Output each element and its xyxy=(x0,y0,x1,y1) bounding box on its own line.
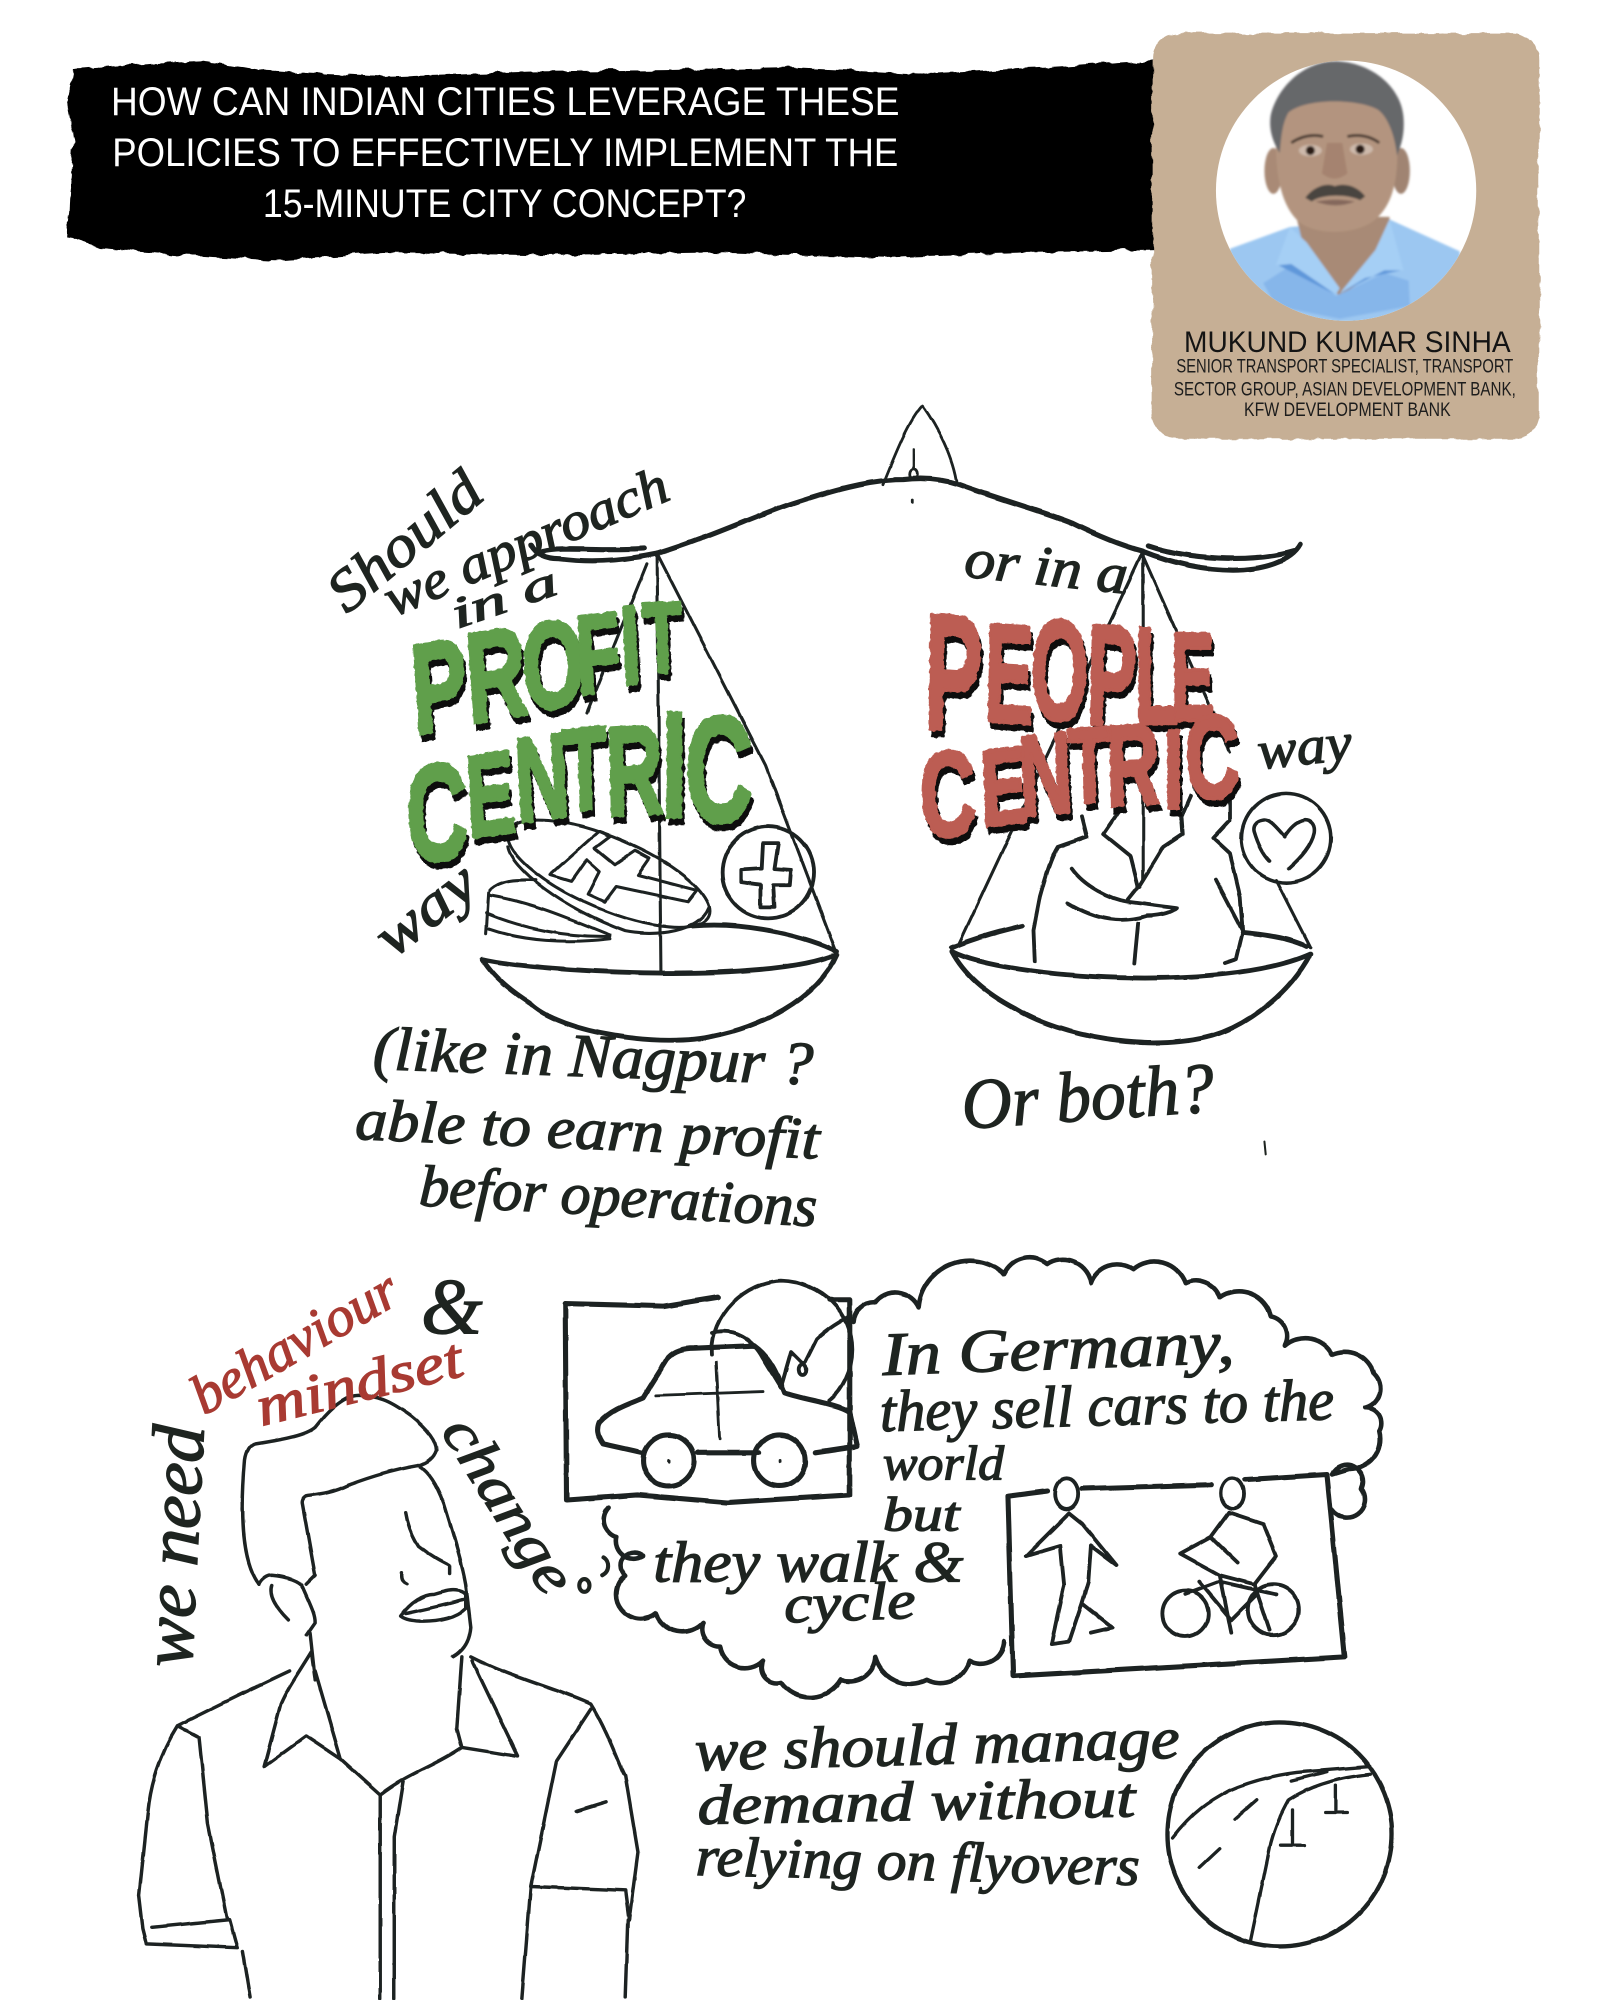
balance scale xyxy=(482,406,1331,1043)
shirt body xyxy=(139,1657,638,1999)
hugging couple xyxy=(1033,796,1243,963)
car xyxy=(598,1346,857,1453)
walking and cycling panel xyxy=(1008,1474,1345,1676)
coins xyxy=(486,798,722,949)
scale apex xyxy=(883,406,957,503)
heading: people centric: P xyxy=(923,579,984,769)
heart icon xyxy=(1241,793,1331,883)
heading: people centric: L xyxy=(1135,600,1178,753)
heading: profit centric: N xyxy=(512,709,572,849)
heading: profit centric: E xyxy=(463,726,518,863)
profit-centric question text: Should xyxy=(314,457,496,625)
Germany text: cycle xyxy=(783,1570,916,1634)
heading: profit centric: T xyxy=(641,580,684,695)
Germany text: but xyxy=(883,1489,961,1542)
profit-centric question text xyxy=(314,455,677,638)
ear xyxy=(259,1575,315,1635)
speaker role xyxy=(1174,355,1516,421)
title text: POLICIES TO EFFECTIVELY IMPLEMENT THE xyxy=(112,130,898,175)
title banner xyxy=(68,60,1161,260)
heading: people centric: R xyxy=(1105,701,1161,831)
profit-centric question text: in a xyxy=(444,557,564,638)
heading: profit centric: I xyxy=(661,681,687,849)
panel frame xyxy=(565,1297,850,1503)
hair and face xyxy=(243,1395,471,1657)
title text: 15-MINUTE CITY CONCEPT? xyxy=(263,181,746,226)
heading: profit centric: I xyxy=(617,582,643,710)
note: Nagpur xyxy=(354,1015,823,1239)
title text: HOW CAN INDIAN CITIES LEVERAGE THESE xyxy=(111,79,900,124)
mindset caption xyxy=(126,1259,589,1669)
label: or in a: or in a xyxy=(962,528,1131,607)
heading: people centric: C xyxy=(1183,689,1242,825)
rupee symbol xyxy=(550,832,697,902)
Germany text: they sell cars to the xyxy=(879,1367,1335,1444)
heading: profit centric: R xyxy=(604,699,664,844)
walker xyxy=(1026,1478,1116,1644)
heading: people centric: E xyxy=(978,725,1030,850)
title text xyxy=(111,79,900,226)
Germany text xyxy=(653,1309,1335,1634)
heading: profit centric: O xyxy=(517,592,588,738)
heading: profit centric: C xyxy=(685,686,752,854)
right pan xyxy=(952,926,1310,1043)
car and globe panel xyxy=(565,1281,857,1503)
flyover icon xyxy=(1167,1722,1392,1946)
text: ampersand: & xyxy=(421,1264,483,1351)
man looking up xyxy=(139,1395,638,1999)
stray pen mark xyxy=(1264,1142,1266,1154)
text: behaviour mindset: behaviour xyxy=(180,1259,410,1427)
speaker photo xyxy=(1212,57,1480,332)
note: or both: Or both? xyxy=(959,1048,1217,1145)
speaker role: KFW DEVELOPMENT BANK xyxy=(1244,399,1451,421)
speaker name: MUKUND KUMAR SINHA xyxy=(1184,326,1511,359)
heading: profit centric: T xyxy=(561,702,609,836)
heading: people centric: I xyxy=(1164,707,1184,832)
globe xyxy=(712,1281,852,1401)
Germany text: In Germany, xyxy=(880,1309,1235,1389)
heading: profit centric: R xyxy=(462,599,531,750)
plus icon xyxy=(722,827,814,918)
heading: profit centric: C xyxy=(403,733,471,893)
left pan xyxy=(482,925,837,1040)
note: Nagpur: (like in Nagpur ? xyxy=(372,1015,815,1098)
heading: people centric xyxy=(917,579,1242,864)
heading: people centric: T xyxy=(1067,706,1111,827)
heading: profit centric xyxy=(403,580,752,893)
profit-centric question text: we approach xyxy=(374,455,677,628)
Germany text: world xyxy=(883,1438,1005,1491)
demand text: relying on flyovers xyxy=(695,1826,1140,1898)
label: way (right): way xyxy=(1254,712,1355,781)
shirt collar xyxy=(264,1633,518,1795)
demand text xyxy=(694,1706,1180,1898)
heading: people centric: P xyxy=(1086,595,1138,758)
text: we need: we need xyxy=(126,1422,221,1669)
text: behaviour mindset: mindset xyxy=(250,1327,471,1439)
heading: people centric: C xyxy=(917,724,978,864)
demand text: we should manage xyxy=(694,1706,1180,1783)
cyclist xyxy=(1162,1478,1299,1636)
note: Nagpur: befor operations xyxy=(418,1153,819,1239)
panel frame xyxy=(1008,1474,1345,1676)
heading: profit centric: F xyxy=(572,589,624,720)
left strings xyxy=(587,554,837,972)
heading: profit centric: P xyxy=(407,611,472,762)
right strings xyxy=(959,554,1310,948)
Germany text: they walk & xyxy=(653,1530,964,1595)
thought bubble dots xyxy=(579,1557,608,1592)
scale beam xyxy=(531,479,1300,570)
text: change: change xyxy=(429,1404,589,1606)
speaker card xyxy=(1152,33,1539,439)
heading: people centric: E xyxy=(1171,609,1214,748)
label: way (left): way xyxy=(361,848,490,969)
thought cloud xyxy=(604,1258,1381,1697)
note: Nagpur: able to earn profit xyxy=(354,1087,823,1172)
heading: people centric: O xyxy=(1029,590,1090,753)
eye and lips xyxy=(401,1513,466,1621)
heading: people centric: E xyxy=(983,594,1035,754)
demand text: demand without xyxy=(697,1767,1137,1837)
heading: people centric: N xyxy=(1016,708,1075,841)
